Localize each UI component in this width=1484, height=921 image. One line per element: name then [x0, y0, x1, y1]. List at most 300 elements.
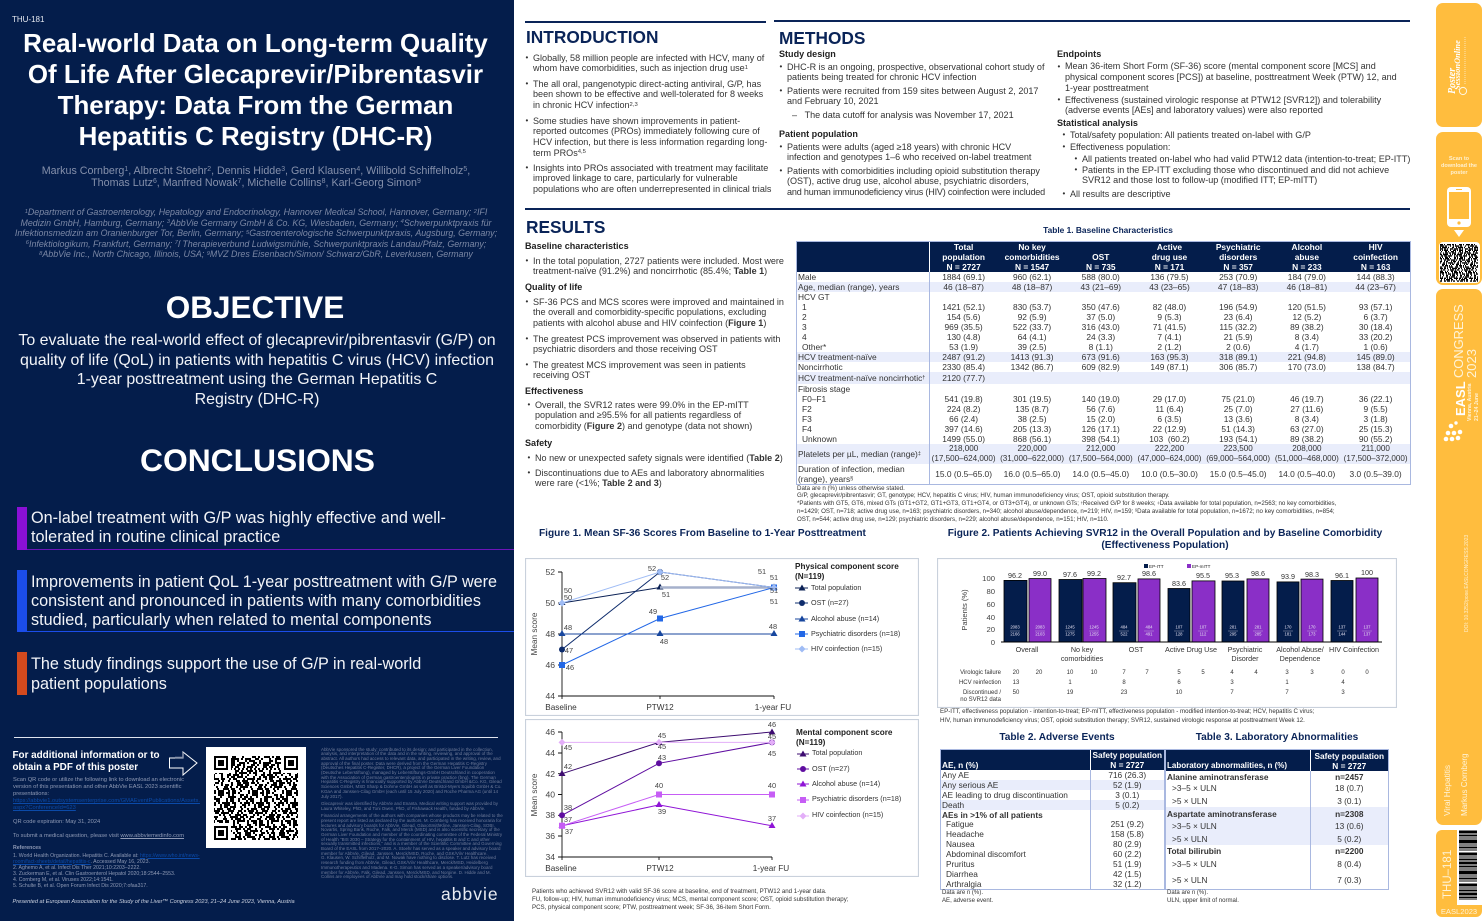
- table 3: laboratory abnormalities: N = 2727: [1332, 760, 1366, 770]
- category labels: Active Drug Use: [1165, 645, 1217, 654]
- table 1: baseline characteristics: (69,000–564,000): [1206, 454, 1270, 463]
- data labels: 39: [658, 807, 666, 816]
- bar fractions: 285: [1254, 632, 1262, 636]
- data labels: 52: [648, 564, 656, 573]
- table 1: baseline characteristics: 39 (2.5): [1018, 342, 1046, 352]
- bar fractions: 2166: [1010, 632, 1020, 636]
- bar values: 93.9: [1281, 572, 1295, 581]
- bar fractions: 1245: [1089, 624, 1099, 630]
- data labels: [564, 564, 778, 672]
- table 1: baseline characteristics: Unknown: [802, 434, 837, 444]
- table 1: baseline characteristics: 51 (14.3): [1221, 424, 1255, 434]
- table 1: baseline characteristics: 126 (17.1): [1082, 424, 1120, 434]
- disclosures: Laura Whiteley, PhD, and Toni Owen, PhD, of Fishawack Health, funded by AbbVie. Financial arrangements of the authors with companies whose products may be related to the: [321, 806, 503, 818]
- table 1: baseline characteristics: 2487 (91.2): [942, 352, 985, 362]
- bar values: 96.2: [1008, 571, 1022, 580]
- table 1: baseline characteristics: Male: [798, 272, 816, 282]
- footer instructions: aspx?ConferenceId=623: [13, 805, 76, 811]
- references: 4. Cornberg M, et al. Viruses 2022;14:1541.: [13, 876, 114, 882]
- table 1: baseline characteristics: 193 (54.1): [1219, 434, 1257, 444]
- disclosures: research funding from AbbVie, Gilead, GSK/ViiV Healthcare, Merck/MSD, Heidelberg: [321, 860, 488, 865]
- bar values: 97.6: [1063, 570, 1077, 579]
- outcome numbers: 0: [1365, 670, 1369, 676]
- patient population bullet 2: and human immunodeficiency virus (HIV) coinfection were included: [787, 187, 1045, 197]
- bar fractions: 137: [1338, 624, 1346, 630]
- table 1: baseline characteristics: N = 2727: [946, 262, 981, 272]
- tab: scan to download: poster: [1450, 170, 1468, 176]
- figure 2 footnote: EP-ITT, effectiveness population - intention-to-treat; EP-mITT, effectiveness population - modified intention-to-treat; HCV, hepatitis C virus;: [940, 708, 1314, 715]
- conclusion 3 text: [31, 654, 421, 692]
- bar fractions: 107: [1200, 624, 1207, 630]
- table 1: baseline characteristics: 13 (3.6): [1224, 414, 1253, 424]
- outcome numbers: 0: [1341, 670, 1345, 676]
- axis labels: 40: [545, 790, 555, 800]
- statistical analysis bullet 3: All results are descriptive: [1070, 188, 1171, 198]
- baseline characteristics heading: Baseline characteristics: [525, 240, 629, 250]
- legend: Psychiatric disorders (n=18): [811, 629, 900, 638]
- affiliations: 8AbbVie Inc., North Chicago, Illinois, USA; 9MVZ Dres Eisenbach/Simon/ Schwarz/GbR, Leverkusen, Germany: [39, 249, 473, 259]
- conclusion 2 text: consistent and pronounced in patients with many comorbidities: [31, 592, 481, 610]
- baseline bullet: treatment-naïve (91.2%) and noncirrhotic (85.4%; Table 1): [533, 266, 767, 276]
- endpoints bullet 2: (adverse events [AEs] and laboratory values) were also reported: [1065, 105, 1323, 115]
- table 1: baseline characteristics: 398 (54.1): [1082, 434, 1120, 444]
- table 1: baseline characteristics: 63 (27.0): [1290, 424, 1324, 434]
- title: Hepatitis C Registry (DHC-R): [79, 123, 432, 151]
- table 1: baseline characteristics: (range), years§: [798, 474, 853, 484]
- affiliations: [15, 207, 497, 259]
- figure 2 title: Figure 2. Patients Achieving SVR12 in the Overall Population and by Baseline Comorbidity: [948, 528, 1382, 539]
- table 1: baseline characteristics: (17,500–624,000): [932, 454, 996, 463]
- legend: OST (n=27): [812, 764, 850, 773]
- table 1: baseline characteristics: N = 171: [1155, 262, 1184, 272]
- data labels: 46: [768, 720, 776, 729]
- table 1: baseline characteristics: F0–F1: [802, 394, 826, 404]
- affiliations: Infektionsmedizin am Oranienburger Tor, Berlin, Germany; 5Gastroenterologische Schwerpunktpraxis, Augsburg, Germany;: [15, 228, 497, 238]
- table 2: adverse events: Arthralgia: [946, 879, 982, 889]
- axis labels: 50: [545, 598, 555, 608]
- series: HIV coinfection: [558, 568, 778, 606]
- table 1: baseline characteristics: drug use: [1152, 252, 1187, 262]
- footer divider: [14, 737, 498, 738]
- figure 2 footnote: HIV, human immunodeficiency virus; OST, opioid substitution therapy; SVR12, sustained virologic response at posttreatment Week 12.: [940, 717, 1305, 724]
- row labels: HCV reinfection: [959, 680, 1001, 686]
- axes: [558, 572, 774, 699]
- table 1: baseline characteristics: 868 (56.1): [1013, 434, 1051, 444]
- introduction bullet 2: in chronic HCV infection2,3: [533, 100, 638, 110]
- data labels: 40: [655, 781, 663, 790]
- table 1: baseline characteristics: 130 (4.8): [947, 332, 980, 342]
- table 2: adverse events: 60 (2.2): [1113, 849, 1142, 859]
- outcome numbers: 20: [1013, 670, 1020, 676]
- disclosures: (Deutsche Leberstiftung), managed by Leberstiftungs-GmbH Deutschland in cooperation: [321, 770, 495, 775]
- category labels: HIV Coinfection: [1329, 645, 1379, 654]
- table 1: baseline characteristics: Fibrosis stage: [798, 384, 850, 394]
- panel: results text: [525, 217, 784, 488]
- table 1: baseline characteristics: 522 (33.7): [1013, 322, 1051, 332]
- axis labels: 48: [545, 629, 555, 639]
- table 3: laboratory abnormalities: Alanine aminotransferase: [1167, 772, 1268, 782]
- legend: (N=119): [796, 738, 826, 747]
- table 1: baseline characteristics: 30 (18.4): [1359, 322, 1392, 332]
- table 1: baseline characteristics: (17,500–564,000): [1069, 454, 1133, 463]
- disclosures: KGaA and Janssen-Cilag GmbH (each until 15 July 2020) and Roche Pharma AG (until 14: [321, 789, 498, 794]
- table 2: adverse events: [941, 750, 1164, 889]
- bar fractions: [1010, 624, 1372, 636]
- endpoints bullet 2: Effectiveness (sustained virologic response at PTW12 [SVR12]) and tolerability: [1065, 94, 1381, 104]
- bar values: 92.7: [1117, 573, 1131, 582]
- table 1: baseline characteristics: F4: [802, 424, 812, 434]
- chart: physical component score: PTW12: [646, 703, 674, 712]
- table 1: baseline characteristics: 609 (82.9): [1082, 362, 1120, 372]
- tab: congress and session details: [1436, 289, 1482, 825]
- outcome numbers: 7: [1145, 670, 1149, 676]
- endpoints bullet 1: physical component scores [PCS]) at baseline, posttreatment Week (PTW) 12, and: [1065, 72, 1397, 82]
- table 1: baseline characteristics: 223,500: [1224, 444, 1253, 453]
- axis labels: [545, 567, 555, 701]
- table 3: laboratory abnormalities: >5 × ULN: [1172, 834, 1208, 844]
- table 3: laboratory abnormalities: Aspartate aminotransferase: [1167, 808, 1277, 818]
- quality of life bullet 1: [533, 296, 784, 329]
- methods heading: METHODS: [779, 28, 865, 48]
- table 1: baseline characteristics: 218,000: [949, 444, 978, 453]
- table 1: baseline characteristics: 208,000: [1292, 444, 1322, 453]
- table 1: baseline characteristics: 43 (21–69): [1081, 282, 1121, 292]
- table 1: baseline characteristics: 8 (3.4): [1295, 414, 1319, 424]
- patient population bullet 1: infection and genotypes 1–6 who received on-label treatment: [787, 152, 1031, 162]
- bar fractions: 107: [1176, 624, 1183, 630]
- table 1: baseline characteristics: 144 (88.3): [1357, 272, 1395, 282]
- axis labels: 44: [545, 691, 555, 701]
- table 1: baseline characteristics: 8 (1.1): [1089, 342, 1113, 352]
- table 1: baseline characteristics: 2 (0.6): [1226, 342, 1250, 352]
- introduction bullet 4: Insights into PROs associated with treatment may facilitate: [533, 162, 768, 172]
- table 1: baseline characteristics: 38 (2.5): [1018, 414, 1046, 424]
- tab: poster session online: [1436, 3, 1482, 127]
- table 1 footnotes: n=1429; OST, n=718; active drug use, n=163; psychiatric disorders, n=340; alcohol abuse/dependence, n=219; HIV, n=159; §Data available for total population, n=1672; no key comorbidities, n=854;: [797, 507, 1335, 515]
- table 1: baseline characteristics: (31,000–622,000): [1000, 454, 1064, 463]
- table 1: baseline characteristics: 205 (13.3): [1013, 424, 1051, 434]
- series: total population: [558, 584, 778, 605]
- table 1: baseline characteristics: 115 (32.2): [1219, 322, 1257, 332]
- table 3: laboratory abnormalities: n=2200: [1335, 846, 1363, 856]
- table 1: baseline characteristics: HIV: [1369, 242, 1383, 252]
- table 1: baseline characteristics: 43 (23–65): [1149, 282, 1190, 292]
- table 2 title: Table 2. Adverse Events: [999, 732, 1115, 743]
- data labels: 48: [769, 622, 777, 631]
- table 1: baseline characteristics: No key: [1018, 242, 1046, 252]
- disclosures: sexually transmitted infections," and is a member of the Scientific Committee and Governing: [321, 841, 502, 846]
- tab: congress and session details: EASL: [1453, 381, 1468, 416]
- references: room/fact-sheets/detail/hepatitis-c. Accessed May 16, 2023.: [13, 858, 150, 864]
- series: OST: [559, 739, 775, 818]
- table 2: adverse events: Abdominal discomfort: [946, 849, 1026, 859]
- category labels: OST: [1129, 645, 1144, 654]
- statistical analysis sub-bullet 1: All patients treated on-label who had valid PTW12 data (intention-to-treat; EP-ITT): [1082, 154, 1410, 164]
- figure 1 footnote: [532, 888, 848, 911]
- bar values: 99.0: [1033, 569, 1047, 578]
- disclosures: analysis, and interpretation of the data and in the writing, reviewing, and approval of the: [321, 751, 493, 756]
- table 1: baseline characteristics: 1499 (55.0): [942, 434, 985, 444]
- table 1: baseline characteristics: 22 (12.9): [1153, 424, 1186, 434]
- bar fractions: 173: [1308, 632, 1316, 636]
- table 2: adverse events: AE leading to drug discontinuation: [942, 790, 1068, 800]
- table 1: baseline characteristics: 46 (18–87): [943, 282, 984, 292]
- table 1: baseline characteristics: 14.0 (0.5–40.0): [1278, 469, 1335, 479]
- tab: congress and session details: Markus Cornberg: [1460, 753, 1469, 816]
- chart: physical component score: Mean score: [530, 612, 539, 655]
- outcome numbers: 7: [1285, 690, 1289, 696]
- conclusion 3 text: patient populations: [31, 674, 167, 692]
- references: 3. Zuckerman E, et al. Clin Gastroenterol Hepatol 2020;18:2544–2553.: [13, 870, 175, 876]
- legend: EP-ITT: [1149, 564, 1164, 569]
- outcome numbers: 10: [1091, 670, 1098, 676]
- data labels: 51: [770, 597, 778, 606]
- disclosures: present report are listed as declared by the authors. M. Cornberg has received honoraria for: [321, 818, 501, 823]
- safety bullet 2: [535, 468, 764, 489]
- data labels: 50: [564, 586, 572, 595]
- table 1: baseline characteristics: 136 (79.5): [1150, 272, 1189, 282]
- conclusion 2 text: Improvements in patient QoL 1-year posttreatment with G/P were: [31, 572, 497, 590]
- row labels: [959, 670, 1002, 703]
- data labels: 49: [649, 607, 657, 616]
- data labels: 47: [565, 646, 573, 655]
- table 1: baseline characteristics: HCV GT: [798, 292, 830, 302]
- statistical analysis sub-bullet 2: SVR12 and those lost to follow-up (modified ITT; EP-mITT): [1082, 175, 1317, 185]
- bar values: 100: [1361, 568, 1373, 577]
- table 1: baseline characteristics: (17,500–372,000): [1344, 454, 1408, 463]
- table 1: baseline characteristics: 120 (51.5): [1288, 302, 1326, 312]
- introduction bullet 4: improved linkage to care, particularly for vulnerable: [533, 173, 738, 183]
- legend: Physical component score: [795, 562, 899, 571]
- table 1: baseline characteristics: 9 (5.5): [1364, 404, 1388, 414]
- quality of life bullet 1: the overall and comorbidity-specific populations, excluding: [533, 307, 766, 317]
- table 1: baseline characteristics: 12 (5.2): [1292, 312, 1321, 322]
- legend: OST (n=27): [811, 598, 849, 607]
- category labels: comorbidities: [1061, 654, 1104, 663]
- legend: Alcohol abuse (n=14): [812, 779, 880, 788]
- table 1: baseline characteristics: 184 (79.0): [1288, 272, 1326, 282]
- statistical analysis sub-bullet 2: Patients in the EP-ITT excluding those who discontinued and did not achieve: [1082, 164, 1389, 174]
- title: [23, 30, 488, 151]
- patient population bullet 2: Patients with comorbidities including opioid substitution therapy: [787, 166, 1040, 176]
- table 2: adverse events: 3 (0.1): [1115, 790, 1139, 800]
- footer instructions: https://abbvie1.outsystemsenterprise.com/GMAEventPublications/Assets.: [13, 798, 200, 804]
- footer heading: obtain a PDF of this poster: [12, 762, 138, 772]
- table 1: baseline characteristics: abuse: [1295, 252, 1319, 262]
- table 1: baseline characteristics: 44 (23–67): [1355, 282, 1396, 292]
- table 1: baseline characteristics: F3: [802, 414, 812, 424]
- table 2: adverse events: AE, n (%): [942, 760, 978, 770]
- table 1: baseline characteristics: 221 (94.8): [1288, 352, 1326, 362]
- axis labels: 40: [986, 613, 995, 622]
- patient population bullet 2: [787, 166, 1045, 198]
- table 1: baseline characteristics: 830 (53.7): [1013, 302, 1051, 312]
- baseline bullet: In the total population, 2727 patients were included. Most were: [533, 256, 784, 266]
- quality of life bullet 1: patients with alcohol abuse and HIV coinfection (Figure 1): [533, 318, 766, 328]
- disclosures: German Liver Foundation and member of the coordinating committee of the Federal Ministry: [321, 832, 502, 837]
- chart: mental component score: PTW12: [646, 864, 674, 873]
- bar fractions: 1275: [1065, 632, 1075, 636]
- table 1: baseline characteristics: 36 (22.1): [1359, 394, 1392, 404]
- table 1: baseline characteristics: 14.0 (0.5–45.0): [1072, 469, 1129, 479]
- outcome numbers: 23: [1121, 690, 1128, 696]
- axis labels: 20: [986, 625, 995, 634]
- bar fractions: 484: [1146, 624, 1153, 630]
- table 1: baseline characteristics: 15 (2.0): [1086, 414, 1115, 424]
- effectiveness bullet: comorbidity (Figure 2) and genotype (data not shown): [535, 421, 752, 431]
- disclosures: Hepatitis C-Registry is financially supported by AbbVie Deutschland GmbH &Co. KG, Gilead: [321, 779, 502, 784]
- table 1: baseline characteristics: Active: [1157, 242, 1182, 252]
- table 2 footnotes: Data are n (%).: [942, 890, 983, 896]
- disclosures: approval of the final poster. Data were derived from the German Hepatitis C-Registry: [321, 761, 487, 766]
- table 3: laboratory abnormalities: 7 (0.3): [1337, 874, 1361, 884]
- data labels: 37: [564, 815, 572, 824]
- table 1: baseline characteristics: 16.0 (0.5–65.0): [1004, 469, 1060, 479]
- tab: poster number and barcode: THU–181: [1442, 850, 1454, 899]
- study design bullet 2: and February 10, 2021: [787, 96, 879, 106]
- table 1: baseline characteristics: 23 (6.4): [1224, 312, 1253, 322]
- outcome numbers: 4: [1254, 670, 1258, 676]
- table 3: laboratory abnormalities: >3–5 × ULN: [1172, 783, 1217, 793]
- references: 1. World Health Organization. Hepatitis C. Available at: https://www.who.int/news-: [13, 852, 200, 858]
- bar fractions: 137: [1364, 632, 1371, 636]
- table 2: adverse events: Any AE: [942, 770, 969, 780]
- table 1: baseline characteristics: 163 (95.3): [1150, 352, 1189, 362]
- table 1: baseline characteristics: 397 (14.6): [945, 424, 983, 434]
- category labels: [1016, 645, 1379, 663]
- outcome numbers: 13: [1013, 680, 1020, 686]
- bar values: 98.6: [1142, 569, 1156, 578]
- chart: mental component score: Baseline: [545, 864, 577, 873]
- study design bullet 2: Patients were recruited from 159 sites between August 2, 2017: [787, 86, 1038, 96]
- quality of life bullet 1: SF-36 PCS and MCS scores were improved and maintained in: [533, 296, 784, 306]
- logo: abbvie: abbvie: [441, 884, 499, 904]
- disclosures: July 2017). Glecaprevir was identified by AbbVie and Enanta. Medical writing support was provided by: [321, 794, 498, 806]
- table 1: baseline characteristics: coinfection: [1353, 252, 1398, 262]
- table 1: baseline characteristics: 969 (35.5): [945, 322, 983, 332]
- outcome numbers: 3: [1230, 680, 1234, 686]
- table 1: baseline characteristics: 541 (19.8): [945, 394, 983, 404]
- affiliations: Medizin GmbH, Hamburg, Germany; 3AbbVie Germany GmbH & Co. KG, Wiesbaden, Germany; 4Schwerpunktpraxis für: [20, 218, 491, 228]
- conclusion 2: [17, 570, 514, 632]
- tab: congress and session details: Viral Hepatitis: [1442, 765, 1452, 816]
- disclosures: of Health "BIS 2030 – Strategy for the containment of HIV, hepatitis B and C and other: [321, 837, 490, 842]
- legend: [1144, 564, 1211, 569]
- series: alcohol abuse: [558, 801, 776, 828]
- table 3: laboratory abnormalities: n=2457: [1335, 772, 1363, 782]
- table 2: adverse events: Fatigue: [946, 819, 974, 829]
- table 1: baseline characteristics: 92 (5.9): [1018, 312, 1046, 322]
- table 1: baseline characteristics: Psychiatric: [1216, 242, 1261, 252]
- tab: poster session online: SessionOnline: [1453, 40, 1462, 90]
- introduction bullet 1: [533, 52, 764, 74]
- footer heading: For additional information or to: [12, 750, 160, 760]
- table 1: baseline characteristics: Alcohol: [1292, 242, 1322, 252]
- data labels: 52: [661, 573, 669, 582]
- table 3: laboratory abnormalities: [1166, 750, 1388, 889]
- table 2: adverse events: 42 (1.5): [1113, 869, 1142, 879]
- table 1: baseline characteristics: 588 (80.0): [1082, 272, 1120, 282]
- patient population bullet 2: (OST), active drug use, alcohol abuse, psychiatric disorders,: [787, 176, 1029, 186]
- table 1: baseline characteristics: 4: [802, 332, 807, 342]
- introduction bullet 4: populations who are often underrepresented in clinical trials: [533, 184, 771, 194]
- category labels: Dependence: [1280, 654, 1320, 663]
- footer instructions: [13, 777, 200, 811]
- table 1: baseline characteristics: 138 (84.7): [1357, 362, 1395, 372]
- table 1: baseline characteristics: 2: [802, 312, 807, 322]
- table 3: laboratory abnormalities: 5 (0.2): [1337, 834, 1361, 844]
- tab: congress and session details: 2023: [1464, 349, 1479, 378]
- axis labels: 46: [545, 660, 555, 670]
- conclusion 1 text: [31, 508, 446, 546]
- introduction bullet 3: HCV infection, but there is less information regarding long-: [533, 137, 767, 147]
- table 3: laboratory abnormalities: 3 (0.1): [1337, 796, 1361, 806]
- axis labels: 38: [545, 810, 555, 820]
- data labels: 45: [658, 731, 666, 740]
- conclusion 2 colour bar: [17, 570, 27, 632]
- table 1: baseline characteristics: 29 (17.0): [1153, 394, 1186, 404]
- table 1: baseline characteristics: 56 (7.6): [1086, 404, 1115, 414]
- conclusion 2 text: [31, 572, 497, 629]
- conclusion 1 text: tolerated in routine clinical practice: [31, 528, 280, 546]
- outcome numbers: 5: [1201, 670, 1205, 676]
- table 2: adverse events: Any serious AE: [942, 780, 998, 790]
- footer heading: [12, 750, 160, 772]
- legend: HIV coinfection (n=15): [812, 810, 883, 819]
- axis labels: 34: [545, 852, 555, 862]
- outcome numbers: 10: [1176, 690, 1183, 696]
- axis labels: [545, 727, 555, 862]
- table 1: baseline characteristics: 47 (18–83): [1218, 282, 1258, 292]
- table 3 title: Table 3. Laboratory Abnormalities: [1196, 732, 1358, 743]
- conclusion 3 colour bar: [17, 652, 27, 695]
- table 1: baseline characteristics: 25 (15.3): [1359, 424, 1392, 434]
- effectiveness bullet: population and ≥95.5% for all patients regardless of: [535, 410, 741, 420]
- conclusion 1 text: On-label treatment with G/P was highly effective and well-: [31, 508, 446, 526]
- data labels: 45: [564, 743, 572, 752]
- outcome numbers: 50: [1013, 690, 1020, 696]
- data labels: 45: [768, 732, 776, 741]
- table 1: baseline characteristics: 6 (3.7): [1364, 312, 1388, 322]
- table 2 footnotes: AE, adverse event.: [942, 898, 993, 904]
- table 1: baseline characteristics: 350 (47.6): [1082, 302, 1120, 312]
- tab: scan to download: download the: [1441, 163, 1477, 169]
- category labels: No key: [1071, 645, 1094, 654]
- bar fractions: 484: [1120, 624, 1128, 630]
- quality of life bullet 3: receiving OST: [533, 370, 590, 380]
- table 2 footnotes: [942, 890, 993, 904]
- footer instructions: Scan QR code or utilize the following link to download an electronic: [13, 777, 184, 783]
- outcome numbers: 1: [1068, 680, 1072, 686]
- table 1: baseline characteristics: 25 (7.0): [1224, 404, 1253, 414]
- data labels: 40: [768, 781, 776, 790]
- effectiveness heading: Effectiveness: [525, 386, 583, 396]
- table 1: baseline characteristics: 1413 (91.3): [1011, 352, 1053, 362]
- table 1: baseline characteristics: 89 (38.2): [1290, 434, 1324, 444]
- outcome numbers: 4: [1230, 670, 1234, 676]
- figure 2 footnote: [940, 708, 1314, 724]
- data labels: 51: [758, 567, 766, 576]
- table 3 footnotes: ULN, upper limit of normal.: [1167, 898, 1239, 904]
- bar fractions: 170: [1284, 624, 1292, 630]
- effectiveness bullet: [535, 400, 752, 432]
- bar fractions: 144: [1338, 632, 1346, 636]
- table 1: baseline characteristics: 8 (3.4): [1295, 332, 1319, 342]
- table 3: laboratory abnormalities: >3–5 × ULN: [1172, 821, 1217, 831]
- quality of life bullet 2: psychiatric disorders and those receiving OST: [533, 344, 718, 354]
- table 1: baseline characteristics: 154 (5.6): [947, 312, 980, 322]
- objective text: quality of life (QoL) in patients with hepatitis C virus (HCV) infection: [20, 352, 494, 368]
